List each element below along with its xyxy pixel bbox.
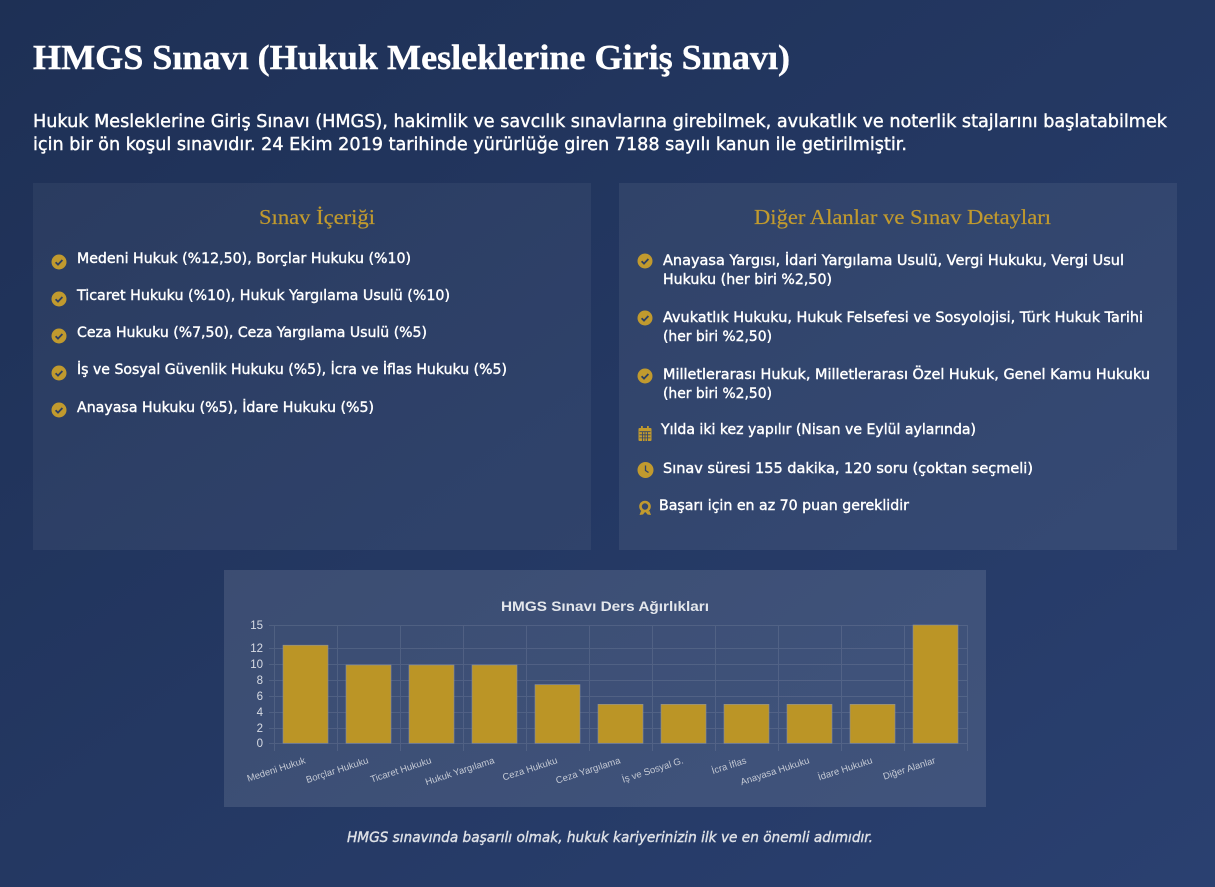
x axis labels: Diğer Alanlar — [882, 755, 937, 783]
intro paragraph — [33, 112, 1168, 155]
icon: award — [640, 502, 651, 515]
list: other subjects and details — [638, 251, 1150, 515]
list: other subjects and details: (her biri %2,50) — [663, 386, 772, 402]
list: exam subjects: Medeni Hukuk (%12,50), Borçlar Hukuku (%10) — [77, 251, 411, 267]
title: HMGS Sınavı (Hukuk Mesleklerine Giriş Sınavı) — [33, 38, 790, 77]
panel: bar chart — [224, 570, 986, 807]
list: other subjects and details: Yılda iki kez yapılır (Nisan ve Eylül aylarında) — [660, 422, 976, 438]
x axis labels: İcra İflas — [710, 755, 748, 777]
x axis labels: Medeni Hukuk — [246, 755, 307, 785]
list: other subjects and details: Avukatlık Hukuku, Hukuk Felsefesi ve Sosyolojisi, Türk Hukuk Tarihi — [663, 310, 1143, 326]
y axis labels: 12 — [250, 643, 263, 655]
heading: other areas: Diğer Alanlar ve Sınav Detayları — [754, 205, 1051, 229]
list: exam subjects: İş ve Sosyal Güvenlik Hukuku (%5), İcra ve İflas Hukuku (%5) — [77, 360, 507, 378]
y axis labels: 15 — [250, 620, 263, 632]
list: other subjects and details: Anayasa Yargısı, İdari Yargılama Usulü, Vergi Hukuku, Vergi Usul — [663, 251, 1124, 269]
list: exam subjects — [52, 251, 507, 418]
chart title: HMGS Sınavı Ders Ağırlıkları — [501, 598, 709, 614]
icon: calendar — [638, 426, 652, 441]
panel: exam content — [33, 183, 591, 550]
intro paragraph: için bir ön koşul sınavıdır. 24 Ekim 2019 tarihinde yürürlüğe giren 7188 sayılı kanun ile getirilmiştir. — [33, 135, 907, 155]
y axis labels: 8 — [257, 675, 263, 687]
x axis labels: Anayasa Hukuku — [739, 755, 811, 788]
x axis labels: Ceza Yargılama — [555, 755, 623, 787]
list: exam subjects: Anayasa Hukuku (%5), İdare Hukuku (%5) — [77, 398, 374, 416]
list: other subjects and details: Hukuku (her biri %2,50) — [663, 272, 832, 288]
y axis labels: 6 — [257, 691, 263, 703]
footer note: HMGS sınavında başarılı olmak, hukuk kariyerinizin ilk ve en önemli adımıdır. — [347, 830, 873, 846]
y axis labels: 4 — [257, 707, 264, 719]
y axis labels: 0 — [257, 738, 263, 750]
y axis labels: 10 — [250, 659, 263, 671]
y axis labels: 2 — [257, 723, 263, 735]
list: exam subjects: Ceza Hukuku (%7,50), Ceza Yargılama Usulü (%5) — [77, 325, 427, 341]
panel: other areas and exam details — [619, 183, 1177, 550]
list: other subjects and details: (her biri %2,50) — [663, 329, 772, 345]
list: other subjects and details: Sınav süresi 155 dakika, 120 soru (çoktan seçmeli) — [663, 461, 1033, 477]
x axis labels: Ceza Hukuku — [501, 755, 559, 783]
x axis labels: İş ve Sosyal G. — [621, 755, 685, 786]
x axis labels: Hukuk Yargılama — [424, 755, 497, 788]
x axis labels: İdare Hukuku — [817, 755, 874, 783]
heading: exam content: Sınav İçeriği — [259, 205, 375, 229]
y axis labels — [250, 620, 264, 750]
list: other subjects and details: Başarı için en az 70 puan gereklidir — [659, 498, 909, 514]
x axis labels: Borçlar Hukuku — [305, 755, 370, 786]
intro paragraph: Hukuk Mesleklerine Giriş Sınavı (HMGS), hakimlik ve savcılık sınavlarına girebilmek, avukatlık ve noterlik stajlarını başlatabilmek — [33, 112, 1168, 132]
x axis labels — [246, 755, 937, 788]
icon: clock — [638, 462, 654, 478]
bars — [283, 625, 958, 743]
list: exam subjects: Ticaret Hukuku (%10), Hukuk Yargılama Usulü (%10) — [76, 288, 450, 304]
list: other subjects and details: Milletlerarası Hukuk, Milletlerarası Özel Hukuk, Genel Kamu Hukuku — [663, 365, 1150, 383]
x axis labels: Ticaret Hukuku — [369, 755, 433, 785]
